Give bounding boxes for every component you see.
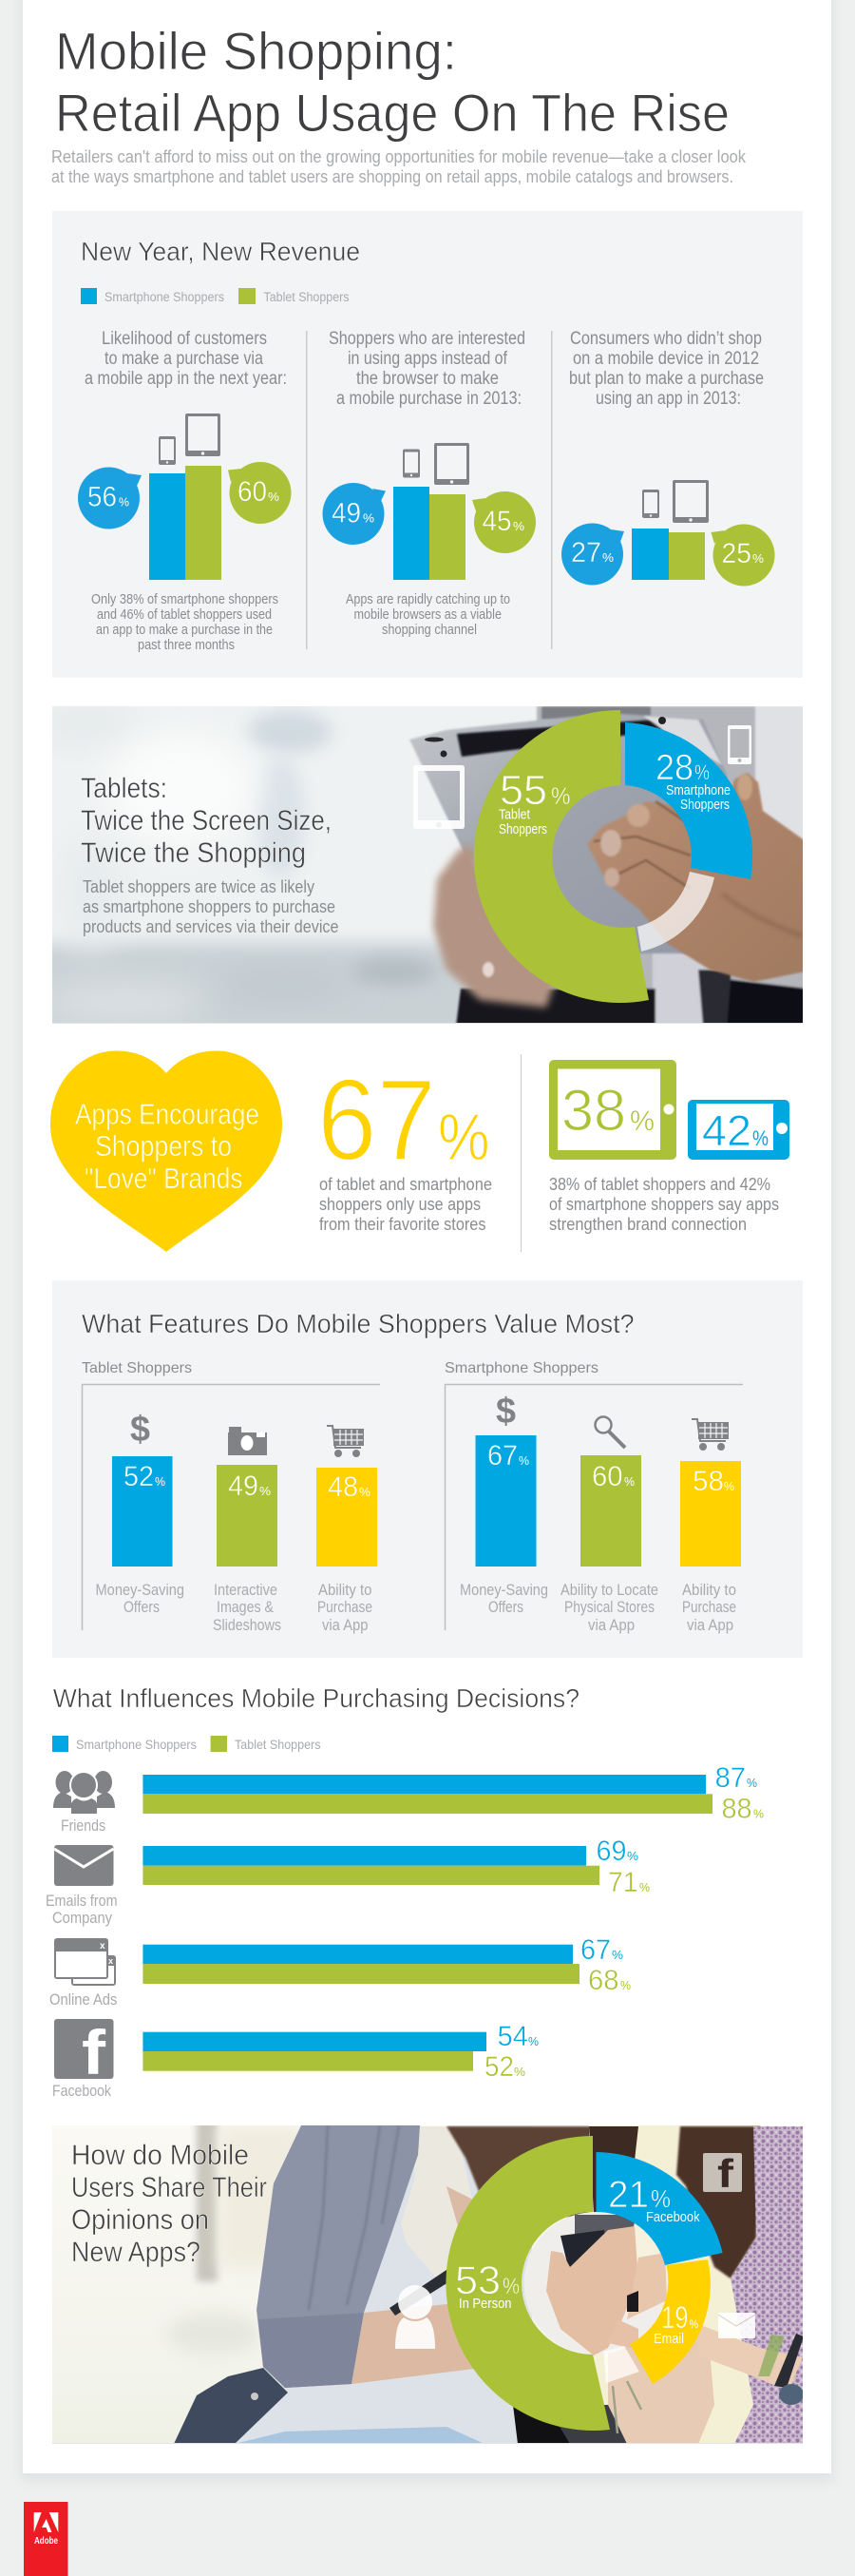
- note: column 1: past three months: [138, 638, 235, 653]
- group: tablet shoppers: [82, 1360, 380, 1634]
- icon: magnifier: [595, 1416, 625, 1448]
- note: column 1: an app to make a purchase in the: [96, 623, 273, 638]
- icon: browser windows: [54, 1938, 116, 1986]
- bars: 52: [484, 2051, 514, 2083]
- heart: Apps Encourage Shoppers to Love Brands: Apps Encourage: [75, 1097, 259, 1131]
- bars: [142, 1762, 764, 1825]
- row: Facebook: [52, 2017, 539, 2100]
- segment: email 19%: Email: [654, 2331, 684, 2347]
- icon: facebook: f: [82, 2017, 106, 2087]
- bars: 68: [588, 1965, 619, 1996]
- bar: ability to purchase 48%: Ability to: [318, 1581, 372, 1599]
- stat: tablet 38%: [549, 1060, 676, 1160]
- bag: [174, 2368, 288, 2444]
- segment: in person 53%: %: [503, 2274, 520, 2299]
- bar: ability to locate 60%: Ability to Locate: [560, 1581, 658, 1599]
- bubble: 27%: %: [602, 550, 614, 565]
- text: 67% description: of tablet and smartphone: [319, 1175, 492, 1194]
- bar: ability to purchase 58%: via App: [687, 1616, 733, 1634]
- bars: %: [639, 1880, 650, 1894]
- text: column 3 question: on a mobile device in 2012: [573, 349, 759, 369]
- bar: money-saving offers 67%: %: [519, 1453, 529, 1468]
- segment: facebook 21%: Facebook: [646, 2209, 700, 2225]
- segment: facebook 21%: 21: [608, 2174, 649, 2216]
- icon: facebook: [703, 2151, 742, 2196]
- segment: smartphone shoppers 28%: %: [694, 760, 710, 784]
- bubble: 56%: %: [119, 494, 129, 509]
- icon: cart: [692, 1419, 729, 1451]
- stat: smartphone 42%: [688, 1100, 789, 1160]
- text: 67% description: [319, 1175, 492, 1234]
- panel edge: [52, 1023, 803, 1024]
- row: Friends: [53, 1762, 764, 1835]
- legend: Smartphone Shoppers: [104, 289, 224, 304]
- bar: money-saving offers 52%: [95, 1410, 184, 1616]
- icon: phone: [642, 490, 659, 518]
- icon: facebook: f: [717, 2151, 734, 2196]
- intro text: at the ways smartphone and tablet users are shopping on retail apps, mobile catalogs and browsers.: [51, 166, 733, 186]
- panel: What Features Do Mobile Shoppers Value Most: [52, 1280, 803, 1658]
- icon: facebook: [54, 2017, 114, 2087]
- row: Friends: Friends: [61, 1817, 105, 1835]
- stat: smartphone 42%: %: [752, 1126, 769, 1150]
- bar: interactive images 49%: Interactive: [214, 1581, 277, 1599]
- bar: ability to purchase 58%: Ability to: [682, 1581, 736, 1599]
- title: Retail App Usage On The Rise: [55, 83, 730, 143]
- bubble: 45%: %: [513, 519, 524, 533]
- note: column 1: [91, 592, 278, 653]
- bars: [142, 2021, 539, 2083]
- icon: tablet: [185, 413, 220, 456]
- dark clothes: [513, 2407, 570, 2443]
- heading: What Influences Mobile Purchasing Decisions: What Influences Mobile Purchasing Decisions?: [53, 1683, 580, 1713]
- text: Tablets description: as smartphone shoppers to purchase: [83, 897, 335, 916]
- bar: ability to locate 60%: [560, 1416, 658, 1634]
- bar: money-saving offers 67%: Money-Saving: [460, 1581, 548, 1599]
- text: column 3 question: but plan to make a purchase: [569, 369, 764, 389]
- text: column 1 question: to make a purchase via: [104, 349, 263, 369]
- bubble: 60%: [228, 462, 291, 524]
- chart: column 2 bars: [393, 443, 469, 580]
- panel edge: [52, 2443, 803, 2444]
- group: smartphone shoppers: Smartphone Shoppers: [445, 1360, 598, 1376]
- lace and hair: [401, 2126, 471, 2278]
- icon: browser windows: x: [100, 1941, 105, 1951]
- bubble: 56%: [78, 468, 142, 529]
- bar: interactive images 49%: [213, 1427, 281, 1634]
- bar: interactive images 49%: %: [259, 1484, 271, 1498]
- segment: tablet shoppers 55%: [474, 710, 649, 1003]
- text: brand connection description: strengthen brand connection: [549, 1215, 747, 1234]
- segment: facebook 21%: [597, 2152, 723, 2265]
- stat: 67%: 67: [317, 1055, 436, 1184]
- bar: ability to locate 60%: %: [624, 1474, 635, 1489]
- bar: money-saving offers 52%: Offers: [124, 1598, 160, 1616]
- text: brand connection description: of smartphone shoppers say apps: [549, 1195, 779, 1214]
- row: Emails from Company: Company: [52, 1909, 112, 1927]
- icon: camera: [228, 1427, 267, 1455]
- text: brand connection description: 38% of tablet shoppers and 42%: [549, 1175, 770, 1194]
- group: tablet shoppers: Tablet Shoppers: [82, 1360, 192, 1376]
- heart: Apps Encourage Shoppers to Love Brands: Shoppers to: [95, 1129, 232, 1163]
- photo: hands holding a tablet: [28, 706, 808, 1038]
- text: column 3 question: [569, 329, 764, 409]
- bar: money-saving offers 67%: 67: [487, 1440, 518, 1471]
- row: Online Ads: Online Ads: [49, 1990, 117, 2009]
- icon: envelope: [718, 2313, 755, 2338]
- heading: What Features Do Mobile Shoppers Value Most?: [82, 1309, 635, 1338]
- bars: %: [620, 1978, 631, 1992]
- text: column 2 question: Shoppers who are interested: [329, 329, 525, 349]
- text: column 1 question: Likelihood of customers: [102, 329, 267, 349]
- text: 67% description: shoppers only use apps: [319, 1195, 481, 1214]
- intro text: Retailers can't afford to miss out on the growing opportunities for mobile revenue—take a closer look: [51, 146, 747, 166]
- icon: browser windows: x: [108, 1956, 113, 1966]
- Adobe logo: [24, 2502, 68, 2576]
- bar: ability to purchase 58%: Purchase: [682, 1598, 736, 1616]
- text: Tablets heading: Twice the Screen Size,: [81, 805, 332, 836]
- bars: [142, 1836, 650, 1898]
- text: How do Mobile Users Share Their Opinions: [71, 2140, 267, 2268]
- bars: %: [627, 1849, 638, 1863]
- bar: ability to purchase 48%: Purchase: [317, 1598, 372, 1616]
- bar: money-saving offers 52%: %: [155, 1474, 165, 1489]
- bar: ability to locate 60%: via App: [588, 1616, 635, 1634]
- chart: column 1 bars: [149, 413, 221, 580]
- inner circle content: [524, 2212, 667, 2355]
- icon: person: [395, 2285, 435, 2349]
- group: smartphone shoppers: [445, 1360, 743, 1634]
- segment: in person 53%: [446, 2136, 610, 2431]
- bar: interactive images 49%: Images &: [217, 1598, 275, 1616]
- note: column 2: shopping channel: [382, 623, 477, 638]
- stat: 67%: %: [438, 1100, 490, 1174]
- segment: tablet shoppers 55%: Tablet: [499, 806, 531, 823]
- bubble: 45%: 45: [483, 506, 511, 537]
- cardigan: [256, 2125, 420, 2388]
- text: Tablets description: products and services via their device: [83, 917, 338, 936]
- bubble: 45%: [472, 491, 536, 553]
- bar: ability to purchase 58%: %: [724, 1479, 734, 1493]
- bar: money-saving offers 52%: 52: [124, 1461, 154, 1492]
- row: Emails from Company: Emails from: [46, 1892, 118, 1910]
- bars: 69: [597, 1836, 627, 1867]
- icon: envelope: [54, 1845, 114, 1886]
- legend: [81, 288, 350, 304]
- segment: smartphone shoppers 28%: Shoppers: [680, 797, 730, 813]
- note: column 1: Only 38% of smartphone shoppers: [91, 592, 278, 607]
- bars: 71: [608, 1867, 638, 1898]
- bars: %: [528, 2034, 539, 2048]
- right hand: [587, 773, 806, 982]
- heading: New Year, New Revenue: New Year, New Revenue: [81, 237, 360, 266]
- panel: Tablets photo: [28, 706, 808, 1038]
- bar: ability to purchase 48%: via App: [322, 1616, 369, 1634]
- bars: 67: [580, 1934, 611, 1966]
- bar: ability to purchase 48%: [316, 1426, 377, 1634]
- segment: smartphone shoppers 28%: Smartphone: [666, 782, 731, 798]
- bar: money-saving offers 67%: [460, 1392, 548, 1616]
- segment: tablet shoppers 55%: 55: [500, 767, 547, 814]
- note: column 2: [346, 592, 510, 638]
- legend: [52, 1736, 321, 1752]
- text: How do Mobile Users Share Their Opinions: Opinions on: [71, 2204, 209, 2236]
- Adobe logo: Adobe: [34, 2536, 58, 2547]
- icon: tablet outline: [413, 765, 465, 829]
- stat: smartphone 42%: 42: [702, 1106, 751, 1155]
- bubble: 60%: %: [268, 490, 279, 504]
- bar: ability to locate 60%: 60: [592, 1461, 623, 1492]
- bars: %: [612, 1948, 623, 1962]
- text: column 1 question: [85, 329, 287, 389]
- bars: 54: [498, 2021, 528, 2052]
- text: column 3 question: Consumers who didn’t shop: [570, 329, 762, 349]
- bars: %: [753, 1807, 764, 1821]
- row: Emails from Company: [46, 1836, 650, 1927]
- segment: email 19%: 19: [661, 2300, 688, 2335]
- bubble: 49%: 49: [332, 498, 361, 529]
- bubble: 60%: 60: [238, 476, 267, 508]
- bubble: 27%: 27: [571, 537, 601, 568]
- icon: tablet: [434, 443, 469, 485]
- bar: money-saving offers 52%: Money-Saving: [95, 1581, 184, 1599]
- row: Facebook: Facebook: [52, 2082, 111, 2100]
- text: column 3 question: using an app in 2013:: [596, 389, 741, 409]
- icon: cart: [327, 1426, 364, 1457]
- jeans: [235, 2427, 484, 2444]
- segment: email 19%: %: [690, 2317, 698, 2331]
- segment: remainder: [604, 2346, 639, 2383]
- segment: smartphone shoppers 28%: [625, 722, 752, 879]
- text: Tablets description: Tablet shoppers are twice as likely: [83, 877, 314, 896]
- chart: column 3 bars: [632, 480, 709, 580]
- bubble: 27%: [561, 523, 624, 586]
- bars: %: [747, 1776, 757, 1790]
- segment: in person 53%: 53: [455, 2258, 501, 2302]
- panel: New Year, New Revenue: [52, 211, 803, 678]
- segment: remainder: [637, 872, 714, 952]
- icon: phone outline: [728, 725, 751, 764]
- title: Mobile Shopping:: [55, 21, 457, 81]
- bar: interactive images 49%: Slideshows: [213, 1616, 281, 1634]
- bars: 87: [715, 1762, 746, 1794]
- tablet: [409, 713, 732, 953]
- row: Online Ads: [49, 1934, 631, 2009]
- bar: ability to purchase 48%: 48: [328, 1471, 358, 1503]
- text: Tablets heading: [81, 773, 332, 869]
- text: How do Mobile Users Share Their Opinions: How do Mobile: [71, 2140, 249, 2171]
- bubble: 49%: %: [363, 511, 374, 525]
- left hand: [433, 844, 556, 1008]
- arm and strap: [352, 2304, 473, 2384]
- note: column 2: Apps are rapidly catching up to: [346, 592, 510, 607]
- text: How do Mobile Users Share Their Opinions: Users Share Their: [71, 2172, 267, 2203]
- segment: tablet shoppers 55%: %: [551, 783, 570, 810]
- bubble: 56%: 56: [87, 481, 117, 513]
- text: Tablets heading: Tablets:: [81, 773, 167, 804]
- legend: Tablet Shoppers: [264, 289, 350, 304]
- right side: [589, 2125, 760, 2449]
- segment: tablet shoppers 55%: Shoppers: [499, 821, 547, 837]
- bubble: 49%: [323, 483, 386, 545]
- text: Tablets description: [83, 877, 338, 936]
- bar: ability to purchase 48%: %: [359, 1485, 370, 1499]
- bracelets and watch: [758, 2335, 785, 2376]
- icon: dollar: $: [130, 1410, 150, 1450]
- panel: How do Mobile Users Share: [52, 2120, 808, 2449]
- white top: [228, 2126, 532, 2444]
- legend: Tablet Shoppers: [235, 1737, 321, 1752]
- note: column 1: and 46% of tablet shoppers used: [97, 607, 272, 623]
- bars: %: [514, 2065, 525, 2079]
- heart: Apps Encourage Shoppers to Love Brands: "Love" Brands: [85, 1162, 243, 1195]
- heart: Apps Encourage Shoppers to Love Brands: [50, 1051, 282, 1252]
- stat: tablet 38%: 38: [561, 1078, 626, 1143]
- text: column 2 question: [329, 329, 525, 409]
- intro text: [51, 146, 747, 186]
- text: How do Mobile Users Share Their Opinions: New Apps?: [71, 2237, 200, 2268]
- text: column 2 question: in using apps instead of: [348, 349, 508, 369]
- text: column 2 question: a mobile purchase in 2013:: [336, 389, 522, 409]
- donut chart: sharing channels: [446, 2136, 723, 2431]
- title: [55, 21, 730, 143]
- icon: phone: [159, 436, 176, 465]
- stat: tablet 38%: %: [630, 1105, 655, 1137]
- bubble: 25%: 25: [722, 538, 751, 569]
- bubble: 25%: [711, 525, 775, 586]
- icon: dollar: $: [496, 1392, 516, 1432]
- bars: 88: [722, 1794, 752, 1825]
- bar: ability to purchase 58%: [680, 1419, 741, 1634]
- segment: email 19%: [630, 2259, 711, 2384]
- suit background: [456, 706, 808, 1029]
- bar: money-saving offers 67%: Offers: [488, 1598, 523, 1616]
- segment: in person 53%: In Person: [459, 2296, 511, 2312]
- forearm: [608, 2329, 714, 2444]
- text: 67% description: from their favorite stores: [319, 1215, 486, 1234]
- segment: facebook 21%: %: [651, 2184, 671, 2213]
- bar: ability to purchase 58%: 58: [693, 1466, 724, 1497]
- note: column 2: mobile browsers as a viable: [353, 607, 502, 623]
- segment: smartphone shoppers 28%: 28: [656, 748, 694, 788]
- legend: Smartphone Shoppers: [76, 1737, 197, 1752]
- bar: interactive images 49%: 49: [228, 1471, 258, 1502]
- icon: tablet: [673, 480, 709, 523]
- text: column 1 question: a mobile app in the next year:: [85, 369, 287, 389]
- icon: phone: [403, 449, 420, 477]
- bars: [142, 1934, 631, 1996]
- text: brand connection description: [549, 1175, 779, 1234]
- text: column 2 question: the browser to make: [356, 369, 499, 389]
- bubble: 25%: %: [752, 551, 764, 566]
- photo: women with a phone: [52, 2120, 808, 2449]
- icon: friends: [53, 1771, 115, 1814]
- bar: ability to locate 60%: Physical Stores: [564, 1598, 655, 1616]
- donut chart: tablets vs smartphones: [474, 710, 752, 1003]
- text: Tablets heading: Twice the Shopping: [81, 837, 306, 869]
